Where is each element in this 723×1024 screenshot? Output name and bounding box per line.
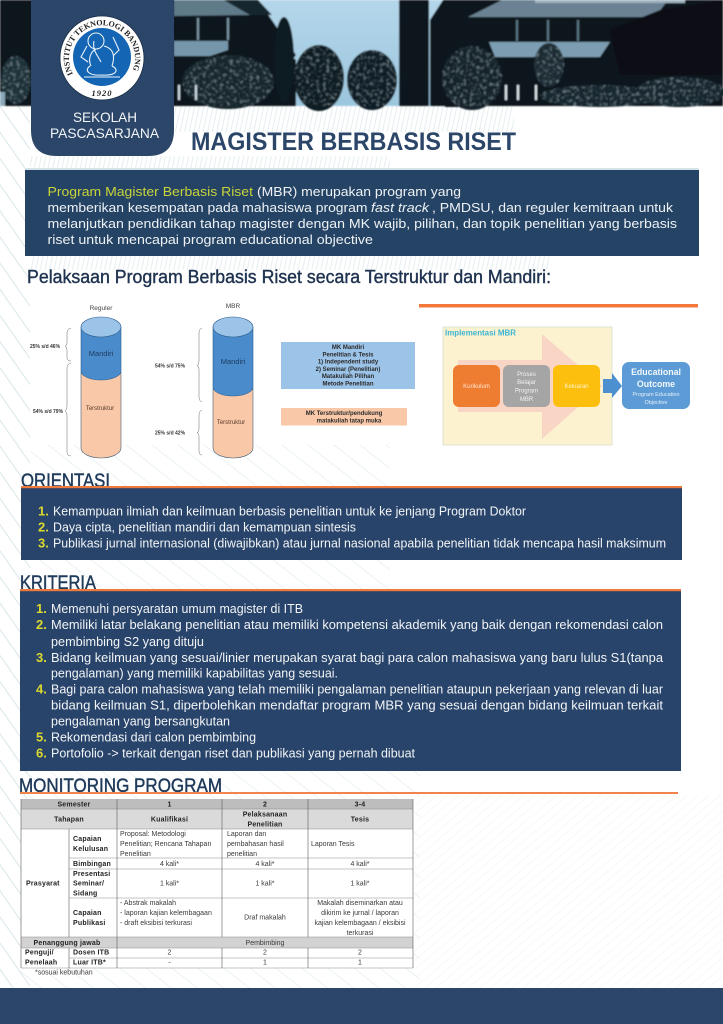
table cells: 2 <box>358 950 362 956</box>
orange rule under monitoring <box>20 792 678 794</box>
chart: cylinders <box>30 303 415 458</box>
intro text: melanjutkan pendidikan tahap magister dengan MK wajib, pilihan, dan topik penelitian yang berbasis <box>48 216 678 231</box>
list: kriteria <box>36 601 664 760</box>
table footnote: *sosuai kebutuhan <box>35 970 93 976</box>
legend: MK Mandiri: MK Mandiri <box>332 345 364 351</box>
logo panel <box>31 0 174 156</box>
table row labels: Dosen ITB <box>73 950 109 956</box>
section heading: kriteria: KRITERIA <box>20 573 96 594</box>
list: kriteria: bidang keilmuan S1, diperbolehkan mendaftar program MBR yang sesuai dengan bidang keilmuan terkait <box>51 698 664 712</box>
cylinder: MBR: Mandiri <box>221 357 246 366</box>
header photo of campus <box>0 0 723 111</box>
legend: MK Mandiri <box>281 342 415 389</box>
cylinder: Reguler <box>30 305 121 458</box>
list: kriteria: 5. <box>36 730 47 744</box>
table header rows: Tesis <box>351 816 369 824</box>
table cells: Proposal: Metodologi <box>120 831 186 838</box>
box: Educational Outcome: Objective <box>645 400 667 406</box>
list: kriteria: 4. <box>36 682 47 696</box>
box: Keluaran: Keluaran <box>564 384 589 390</box>
table header rows: 2 <box>263 802 267 808</box>
table row labels: Kelulusan <box>73 846 108 853</box>
list: kriteria: pengalaman yang bersangkutan <box>51 714 230 728</box>
table row labels: Sidang <box>73 890 98 898</box>
table row labels: Bimbingan <box>73 861 111 868</box>
box: Kurikulum: Kurikulum <box>463 384 490 390</box>
legend: MK Mandiri: 1) Independent study <box>318 360 379 366</box>
table header rows: 3-4 <box>355 802 365 808</box>
box: Proses Belajar <box>503 365 550 407</box>
list: kriteria: Portofolio -> terkait dengan riset dan publikasi yang pernah dibuat <box>51 746 416 760</box>
list: kriteria: pembimbing S2 yang dituju <box>51 635 204 649</box>
table row labels: Penelaah <box>25 960 57 966</box>
table cells <box>120 831 406 966</box>
list: orientasi: Kemampuan ilmiah dan keilmuan berbasis penelitian untuk ke jenjang Program Doktor <box>53 504 526 518</box>
table row labels <box>25 836 111 966</box>
intro text: , PMDSU, dan reguler kemitraan untuk <box>432 200 674 215</box>
cylinder: MBR: MBR <box>226 303 241 310</box>
list: orientasi: 2. <box>38 520 49 534</box>
table cells: Laporan Tesis <box>311 841 355 848</box>
intro text: riset untuk mencapai program educational objective <box>48 232 373 247</box>
legend: MK Mandiri: Matakuliah Pilihan <box>322 374 374 380</box>
legend: MK Mandiri: Penelitian & Tesis <box>323 352 374 358</box>
table row labels: Penguji/ <box>25 950 54 956</box>
cylinder: Reguler: Reguler <box>90 305 113 312</box>
cylinder: MBR <box>155 303 253 458</box>
table cells: 4 kali* <box>350 861 370 868</box>
table cells: terkurasi <box>347 930 374 937</box>
cylinder: MBR: Terstruktur <box>217 420 245 426</box>
table row labels: Capaian <box>73 836 102 843</box>
table row labels: Luar ITB* <box>73 960 106 966</box>
table cells: - laporan kajian kelembagaan <box>120 910 212 917</box>
list: orientasi <box>38 504 666 550</box>
table cells: Pembimbing <box>246 940 285 947</box>
box: Proses Belajar: Proses <box>517 372 536 378</box>
panel: implementasi <box>443 327 612 445</box>
cylinder: Reguler: Terstruktur <box>86 406 114 412</box>
panel: introduction <box>25 170 699 256</box>
box: Proses Belajar: MBR <box>520 397 534 403</box>
list: orientasi: 1. <box>38 504 49 518</box>
panel: implementasi: Implementasi MBR <box>445 328 516 338</box>
school name: SEKOLAH <box>73 109 137 125</box>
section heading: monitoring program: MONITORING PROGRAM <box>19 776 222 797</box>
list: kriteria: Rekomendasi dari calon pembimbing <box>51 730 256 744</box>
table row labels: Penanggung jawab <box>34 940 100 947</box>
table cells: Laporan dan <box>227 831 266 838</box>
school name <box>50 109 160 141</box>
box: Proses Belajar: Program <box>515 388 538 394</box>
panel: kriteria <box>20 589 681 771</box>
box: Kurikulum <box>453 365 500 407</box>
intro text: fast track <box>371 200 431 215</box>
box: Educational Outcome: Outcome <box>637 379 675 389</box>
cylinder: MBR: 54% s/d 75% <box>155 364 186 370</box>
diagram: implementasi MBR <box>443 327 690 445</box>
cylinder: Reguler: Mandiri <box>89 349 114 358</box>
table row labels: Prasyarat <box>26 880 60 888</box>
table row labels: Publikasi <box>73 920 106 927</box>
list: kriteria: pengalaman) yang memiliki kapabilitas yang sesuai. <box>51 666 338 680</box>
table cells: 4 kali* <box>255 861 275 868</box>
table cells: 4 kali* <box>160 861 179 868</box>
list: orientasi: Daya cipta, penelitian mandiri dan kemampuan sintesis <box>53 520 356 534</box>
list: kriteria: Bidang keilmuan yang sesuai/linier merupakan syarat bagi para calon mahasiswa yang baru lulus S1(tanpa <box>51 651 663 665</box>
table cells: 1 kali* <box>160 880 179 888</box>
footer bar <box>0 988 723 1024</box>
table cells: - Abstrak makalah <box>120 900 176 907</box>
panel: orientasi <box>21 486 682 560</box>
table cells: Penelitian; Rencana Tahapan <box>120 841 211 848</box>
table cells: 1 kali* <box>350 880 370 888</box>
table header rows: Penelitian <box>247 822 283 828</box>
table cells: 1 <box>358 960 362 966</box>
list: kriteria: Memiliki latar belakang penelitian atau memiliki kompetensi akademik yang baik dengan rekomendasi calon <box>51 618 663 632</box>
intro text: Program Magister Berbasis Riset <box>48 184 253 199</box>
table row labels: Capaian <box>73 910 102 917</box>
title: MAGISTER BERBASIS RISET <box>191 128 516 156</box>
table cells: Draf makalah <box>244 914 286 922</box>
list: kriteria: 1. <box>36 601 47 616</box>
intro text: (MBR) merupakan program yang <box>257 184 461 199</box>
orange rule <box>419 304 698 308</box>
table cells: 2 <box>168 950 172 956</box>
box: Educational Outcome: Educational <box>631 367 681 377</box>
box: Educational Outcome: Program Education <box>632 392 680 398</box>
table header rows: Semester <box>57 802 91 808</box>
table cells: penelitian <box>227 851 257 858</box>
table cells: Makalah diseminarkan atau <box>317 900 403 907</box>
logo: ITB seal: INSTITUT TEKNOLOGI BANDUNG <box>64 20 140 76</box>
table header rows <box>54 802 369 828</box>
cylinder: Reguler: 25% s/d 46% <box>30 344 61 350</box>
table cells: - draft eksibisi terkurasi <box>120 920 192 927</box>
logo: ITB seal: 1920 <box>92 88 112 98</box>
intro text <box>48 184 678 247</box>
list: kriteria: Memenuhi persyaratan umum magister di ITB <box>51 602 303 616</box>
table row labels: Presentasi <box>73 871 110 878</box>
table cells: dikirim ke jurnal / laporan <box>321 910 399 917</box>
table cells: pembahasan hasil <box>227 841 284 848</box>
box: Educational Outcome <box>622 362 690 409</box>
legend: MK Terstruktur: MK Terstruktur/pendukung <box>306 411 383 417</box>
section heading: pelaksanaan: Pelaksaan Program Berbasis Riset secara Terstruktur dan Mandiri: <box>27 267 551 287</box>
table cells: kajian kelembagaan / eksibisi <box>314 920 406 927</box>
list: orientasi: Publikasi jurnal internasional (diwajibkan) atau jurnal nasional apabila penelitian tidak mencapa hasil maksimum <box>53 536 666 550</box>
icon: Ganesha <box>81 33 120 77</box>
list: kriteria: Bagi para calon mahasiswa yang telah memiliki pengalaman penelitian ataupun pekerjaan yang relevan di luar <box>51 682 663 696</box>
logo: ITB seal <box>60 16 144 100</box>
box: Keluaran <box>553 365 600 407</box>
list: kriteria: 6. <box>36 746 47 760</box>
arrow: to outcome <box>603 373 622 398</box>
table row labels: Seminar/ <box>73 880 104 888</box>
table cells: Penelitian <box>120 851 151 858</box>
table header rows: Kualifikasi <box>151 816 188 824</box>
box: Proses Belajar: Belajar <box>517 380 536 386</box>
table cells: 2 <box>263 950 267 956</box>
legend: MK Terstruktur: matakuliah tatap muka <box>317 418 382 424</box>
table cells: 1 kali* <box>255 880 275 888</box>
section heading: orientasi: ORIENTASI <box>21 471 110 492</box>
table header rows: Tahapan <box>54 816 84 824</box>
table header rows: Pelaksanaan <box>243 812 287 818</box>
list: kriteria: 3. <box>36 650 47 665</box>
cylinder: MBR: 25% s/d 42% <box>155 430 186 436</box>
list: kriteria: 2. <box>36 617 47 632</box>
cylinder: Reguler: 54% s/d 79% <box>33 409 64 415</box>
list: orientasi: 3. <box>38 536 49 550</box>
table header rows: 1 <box>167 802 172 808</box>
legend: MK Mandiri: Metode Penelitian <box>322 382 374 388</box>
table: monitoring <box>21 799 413 976</box>
legend: MK Terstruktur <box>281 408 407 426</box>
intro text: memberikan kesempatan pada mahasiswa program <box>48 200 368 215</box>
school name: PASCASARJANA <box>50 125 160 141</box>
table cells: - <box>168 960 171 966</box>
legend: MK Mandiri: 2) Seminar (Penelitian) <box>316 367 380 373</box>
table cells: 1 <box>263 960 267 966</box>
